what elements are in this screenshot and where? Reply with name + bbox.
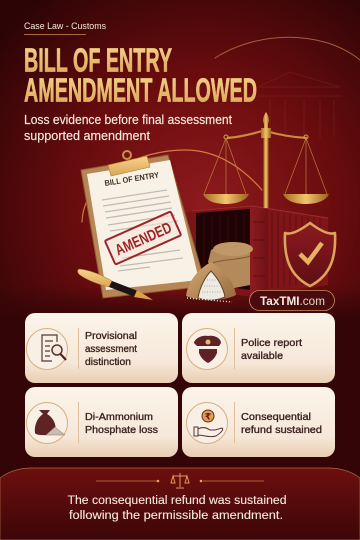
eyebrow: category bbox=[24, 21, 106, 35]
subtitle bbox=[24, 112, 232, 143]
card label: Di-Ammonium bbox=[85, 411, 153, 423]
card label: available bbox=[241, 350, 283, 362]
card label: Police report bbox=[241, 337, 302, 349]
title: BILL OF ENTRY bbox=[24, 42, 172, 78]
icon: hand with rupee coin: ₹ bbox=[205, 412, 211, 422]
eyebrow: category: Case Law - Customs bbox=[24, 21, 106, 31]
card label: assessment bbox=[85, 343, 137, 355]
footer text: following the permissible amendment. bbox=[69, 508, 283, 522]
decorative arc bbox=[82, 37, 360, 222]
card: consequential refund sustained bbox=[182, 387, 335, 457]
card label bbox=[85, 411, 158, 436]
card: di-ammonium phosphate loss bbox=[25, 387, 178, 457]
icon: shield with check bbox=[285, 223, 335, 286]
clipboard document bbox=[81, 151, 206, 298]
icon: balance scale bbox=[203, 112, 329, 208]
card label: Consequential bbox=[241, 411, 311, 423]
badge: TaxTMI.com bbox=[250, 290, 334, 310]
stamp: amended: AMENDED bbox=[113, 219, 174, 259]
footer text bbox=[68, 493, 287, 522]
card label: distinction bbox=[85, 356, 131, 368]
clipboard document: BILL OF ENTRY bbox=[104, 170, 160, 188]
title bbox=[24, 42, 257, 108]
card label bbox=[241, 411, 322, 436]
card label: Provisional bbox=[85, 330, 137, 342]
badge: TaxTMI.com: TaxTMI.com bbox=[260, 294, 325, 308]
icon: hand with rupee coin bbox=[186, 402, 228, 444]
icon: gold pen bbox=[78, 269, 153, 300]
footer panel bbox=[0, 468, 360, 540]
grain sacks bbox=[186, 242, 253, 302]
card: police report available bbox=[182, 313, 335, 383]
card label: refund sustained bbox=[241, 424, 322, 436]
icon: police cap bbox=[186, 328, 228, 370]
faint courthouse bbox=[258, 72, 342, 138]
shipping container bbox=[178, 206, 328, 297]
card: provisional assessment distinction bbox=[25, 313, 178, 383]
card label: Phosphate loss bbox=[85, 424, 158, 436]
footer text: The consequential refund was sustained bbox=[68, 493, 287, 507]
card label bbox=[85, 330, 137, 368]
icon: sack with powder bbox=[26, 402, 68, 444]
icon: small scale bbox=[171, 473, 189, 488]
subtitle: supported amendment bbox=[24, 128, 150, 143]
subtitle: Loss evidence before final assessment bbox=[24, 112, 232, 127]
card label bbox=[241, 337, 302, 362]
icon: document with magnifier bbox=[26, 328, 68, 370]
